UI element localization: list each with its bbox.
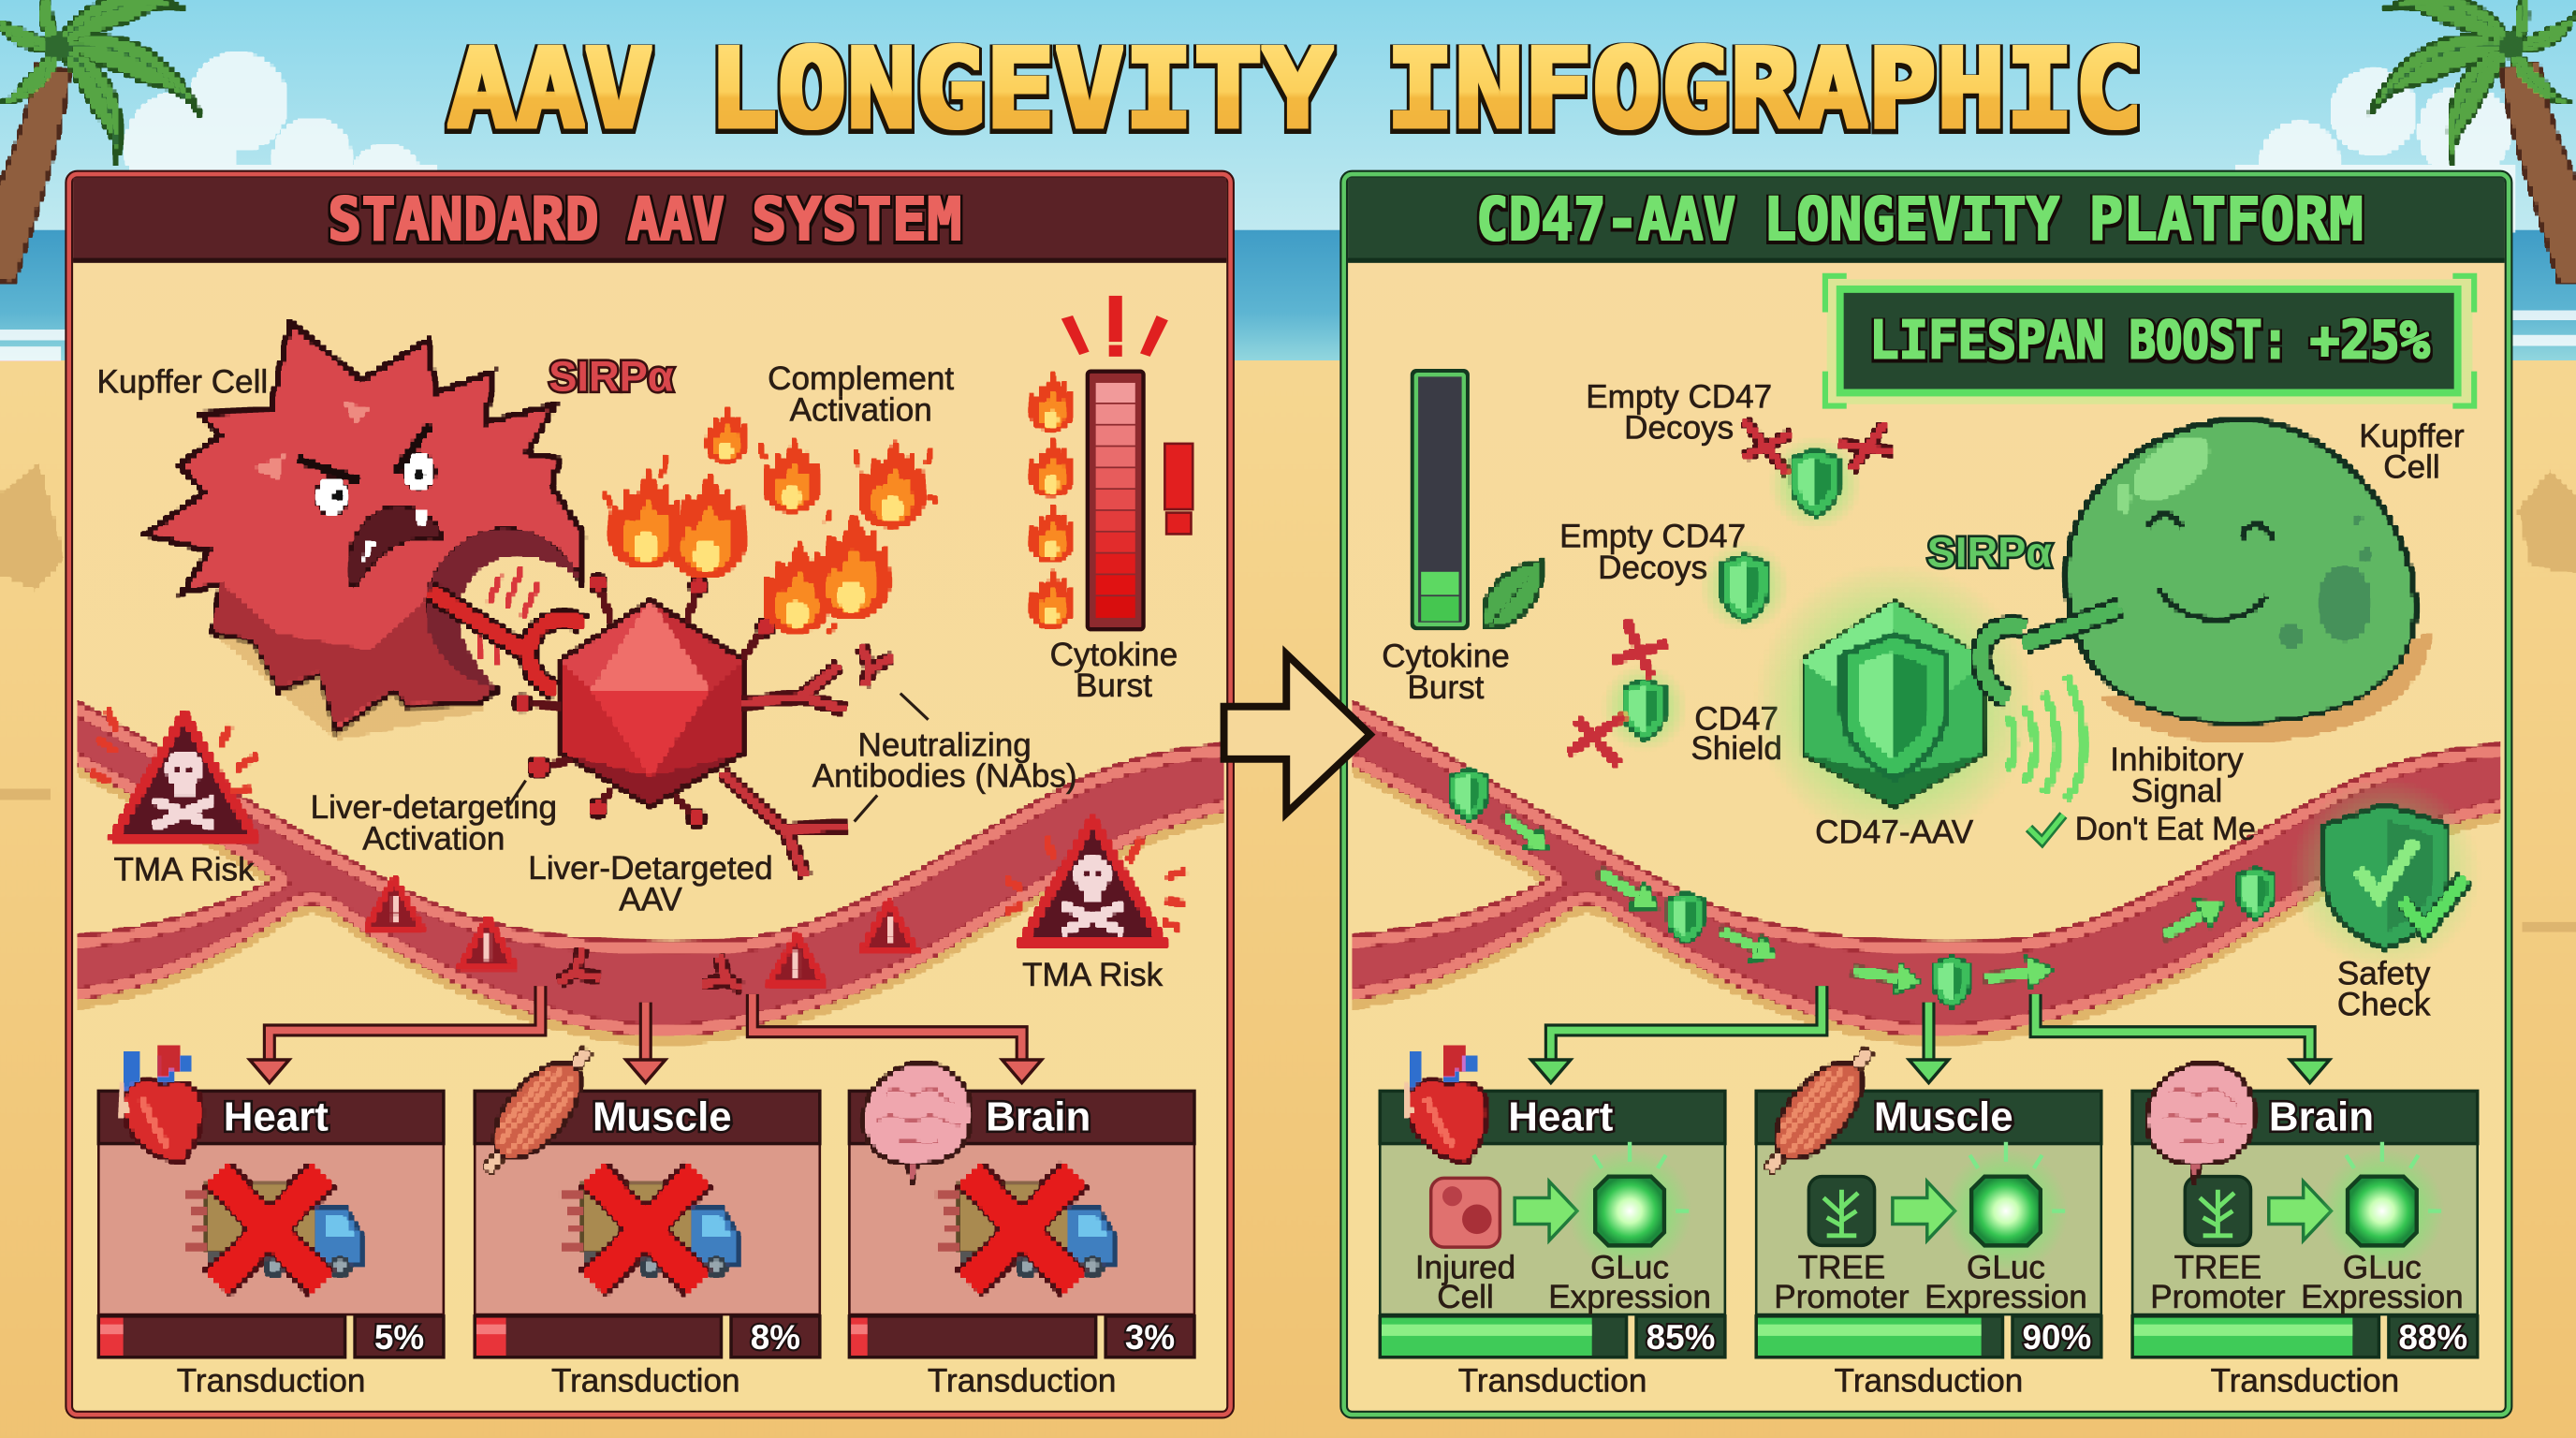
neutralizing antibodies label: Neutralizing [858,726,1032,763]
transduction bar 8 percent: 8% [751,1318,800,1357]
injured cell icon [1431,1178,1500,1247]
CD47-AAV label: CD47-AAV [1815,814,1974,850]
transduction label: Transduction [551,1363,740,1400]
panel heading: PLATFORM [2089,184,2364,254]
card heading muscle: Muscle [1874,1094,2013,1140]
card heading brain: Brain [986,1094,1090,1140]
cytokine burst label: Burst [1076,668,1152,704]
safety check shield [2291,779,2481,970]
blocked delivery truck [560,1175,738,1284]
labels GLuc expression [2301,1249,2464,1315]
liver-detargeted AAV label: Liver-Detargeted [528,850,773,887]
labels TREE promoter: TREE [2174,1249,2261,1285]
organ icon heart [1405,1047,1486,1164]
card: muscle [1748,1034,2101,1400]
card heading brain: Brain [2269,1094,2374,1140]
empty CD47 decoys label top [1586,378,1772,447]
blocked delivery truck [936,1175,1114,1284]
cytokine burst gauge low [1412,372,1467,627]
liver-detargeted AAV virus [514,575,774,827]
labels injured cell: Injured [1415,1249,1515,1285]
cytokine burst label [1382,638,1510,706]
cytokine burst label: Burst [1408,669,1485,706]
background: sky [0,0,2576,238]
card: brain [849,1063,1194,1400]
card: heart [98,1047,444,1400]
clouds right [2234,69,2513,233]
kupffer cell label [2359,418,2465,486]
TREE promoter icon [2185,1177,2250,1245]
complement flames [605,407,936,633]
transduction bar 8 percent [475,1316,820,1357]
labels TREE promoter: TREE [1798,1249,1885,1285]
cytokine burst label: Cytokine [1050,637,1178,673]
CD47-AAV virus with shield [1754,564,2034,843]
panel heading: LONGEVITY [1764,184,2059,254]
safety check label: Check [2337,987,2431,1023]
liver-detargeted AAV label [528,850,773,917]
panel heading: STANDARD [328,184,599,254]
happy green kupffer cell [2067,420,2432,742]
delivery pipes to organs [250,986,1042,1083]
panel heading [1476,184,2364,254]
organ icon muscle [466,1034,608,1188]
panel: CD47-AAV longevity platform [1334,174,2524,1415]
delivery pipes to organs [1531,986,2330,1083]
lifespan boost text: +25% [2310,311,2430,372]
labels GLuc expression: Expression [2301,1279,2464,1315]
GLuc expression icon [2320,1142,2445,1273]
kupffer cell label: Cell [2383,449,2440,486]
transduction label: Transduction [1458,1363,1647,1400]
SIRP alpha arm grabbing virus [431,592,583,690]
card heading heart: Heart [224,1094,329,1140]
panel heading: CD47-AAV [1476,184,1735,254]
title: AAV [447,26,653,153]
kupffer cell label: Kupffer [2359,418,2465,454]
GLuc expression icon [1943,1142,2069,1273]
card heading heart: Heart [1508,1094,1614,1140]
labels GLuc expression: GLuc [1967,1249,2045,1285]
don't eat me label: Don't Eat Me [2075,811,2256,847]
blood vessel [1334,700,2524,1045]
card: brain [2132,1063,2478,1400]
panel frame [1344,174,2509,1415]
organ icon muscle [1748,1034,1890,1188]
TREE promoter icon [1808,1177,1875,1245]
neutralizing antibodies label [812,694,1077,822]
complement activation label: Activation [790,391,932,428]
title: INFOGRAPHIC [1385,26,2144,153]
empty CD47 decoys label top: Empty CD47 [1586,378,1772,415]
panel frame [69,174,1231,1415]
inhibitory signal label [2110,741,2244,809]
GLuc expression icon [1567,1142,1692,1273]
green SIRP alpha arm [1981,608,2119,698]
background: beach sand [0,312,2576,1438]
alert marks above gauge [1061,296,1168,357]
complement activation label: Complement [768,360,954,397]
transduction label: Transduction [177,1363,365,1400]
inhibitory signal waves [2008,677,2084,799]
leaf icon [1484,562,1542,627]
labels GLuc expression: GLuc [1590,1249,1669,1285]
transduction bar 5 percent [98,1316,444,1357]
gauge flames [1030,373,1073,628]
empty CD47 decoys label lower: Empty CD47 [1559,518,1746,554]
palm tree left [0,0,209,283]
labels TREE promoter: Promoter [2150,1279,2286,1315]
panel heading: SYSTEM [752,184,962,254]
labels injured cell [1415,1249,1515,1315]
transduction bar 5 percent: 5% [374,1318,424,1357]
title [447,26,2144,153]
transduction label: Transduction [928,1363,1116,1400]
card heading muscle: Muscle [593,1094,732,1140]
lifespan boost text: LIFESPAN [1869,311,2104,372]
TMA risk hazard left [92,710,256,838]
kupffer cell monster [148,324,583,740]
transduction bar 90 percent: 90% [2023,1318,2091,1357]
transduction bar 3 percent [849,1316,1194,1357]
labels GLuc expression [1925,1249,2087,1315]
transduction bar 88 percent: 88% [2398,1318,2467,1357]
palm tree right [2361,0,2576,283]
cytokine burst gauge high [1088,372,1144,629]
labels injured cell: Cell [1437,1279,1494,1315]
labels GLuc expression: GLuc [2343,1249,2422,1285]
vessel flow arrows [1497,806,2231,997]
TMA risk label right: TMA Risk [1022,957,1164,993]
labels TREE promoter: Promoter [1774,1279,1910,1315]
CD47 shield label [1690,700,1782,767]
card: heart [1380,1047,1725,1400]
liver-detargeted AAV label: AAV [619,881,682,917]
title: LONGEVITY [708,26,1333,153]
CD47 shield label: Shield [1690,730,1782,767]
transduction bar 90 percent [1756,1316,2101,1357]
vessel warning triangles [366,879,916,984]
clouds left [124,52,435,233]
TMA risk hazard right [1005,820,1186,943]
panel: standard AAV system [59,174,1249,1415]
vessel shields [1451,770,2274,1007]
CD47 shield label: CD47 [1694,700,1778,737]
lifespan boost text [1869,311,2430,372]
side exclamation [1164,444,1193,534]
blood vessel [59,700,1249,1045]
lifespan boost badge [1825,276,2474,406]
liver-detargeting activation label: Activation [362,820,505,857]
complement activation label [768,360,954,428]
neutralizing antibodies label: Antibodies (NAbs) [812,758,1077,795]
organ icon heart [120,1047,202,1164]
liver-detargeting activation label [311,781,557,857]
kupffer cell label: Kupffer Cell [96,363,268,400]
transduction label: Transduction [2211,1363,2399,1400]
transduction label: Transduction [1835,1363,2023,1400]
blocked delivery truck [184,1175,361,1284]
transduction bar 85 percent: 85% [1647,1318,1715,1357]
vessel antibodies [551,949,750,1003]
cytokine burst label: Cytokine [1382,638,1510,675]
transduction bar 88 percent [2132,1316,2478,1357]
card: muscle [466,1034,820,1400]
labels TREE promoter [2150,1249,2286,1315]
background: sea [0,230,2576,368]
CD47 shield with bound antibodies [1569,621,1687,764]
empty CD47 decoys label lower [1559,518,1746,586]
labels TREE promoter [1774,1249,1910,1315]
inhibitory signal label: Inhibitory [2110,741,2244,778]
organ icon brain [2147,1063,2254,1183]
empty CD47 decoys label lower: Decoys [1598,550,1707,586]
labels GLuc expression: Expression [1925,1279,2087,1315]
arrow [1893,1181,1955,1240]
central arrow between panels [1224,654,1370,814]
SIRP alpha label red: SIRPα [549,353,674,401]
arrow [1515,1181,1577,1240]
labels GLuc expression: Expression [1548,1279,1711,1315]
transduction bar 85 percent [1380,1316,1725,1357]
inhibitory signal label: Signal [2131,772,2222,809]
safety check label: Safety [2337,955,2431,991]
cytokine burst label [1050,637,1178,704]
safety check label [2337,955,2431,1023]
empty CD47 decoys label top: Decoys [1624,410,1734,447]
panel heading [328,184,962,254]
decoy shield [1701,542,1789,631]
antibodies attached to virus [723,647,892,875]
labels GLuc expression [1548,1249,1711,1315]
transduction bar 3 percent: 3% [1125,1318,1175,1357]
panel heading: AAV [627,184,724,254]
arrow [2269,1181,2331,1240]
organ icon brain [864,1063,971,1183]
TMA risk label left: TMA Risk [114,852,255,888]
liver-detargeting activation label: Liver-detargeting [311,789,557,826]
decoy shield with antibodies [1745,420,1893,529]
lifespan boost text: BOOST: [2130,311,2289,372]
SIRP alpha label green: SIRPα [1927,529,2052,577]
